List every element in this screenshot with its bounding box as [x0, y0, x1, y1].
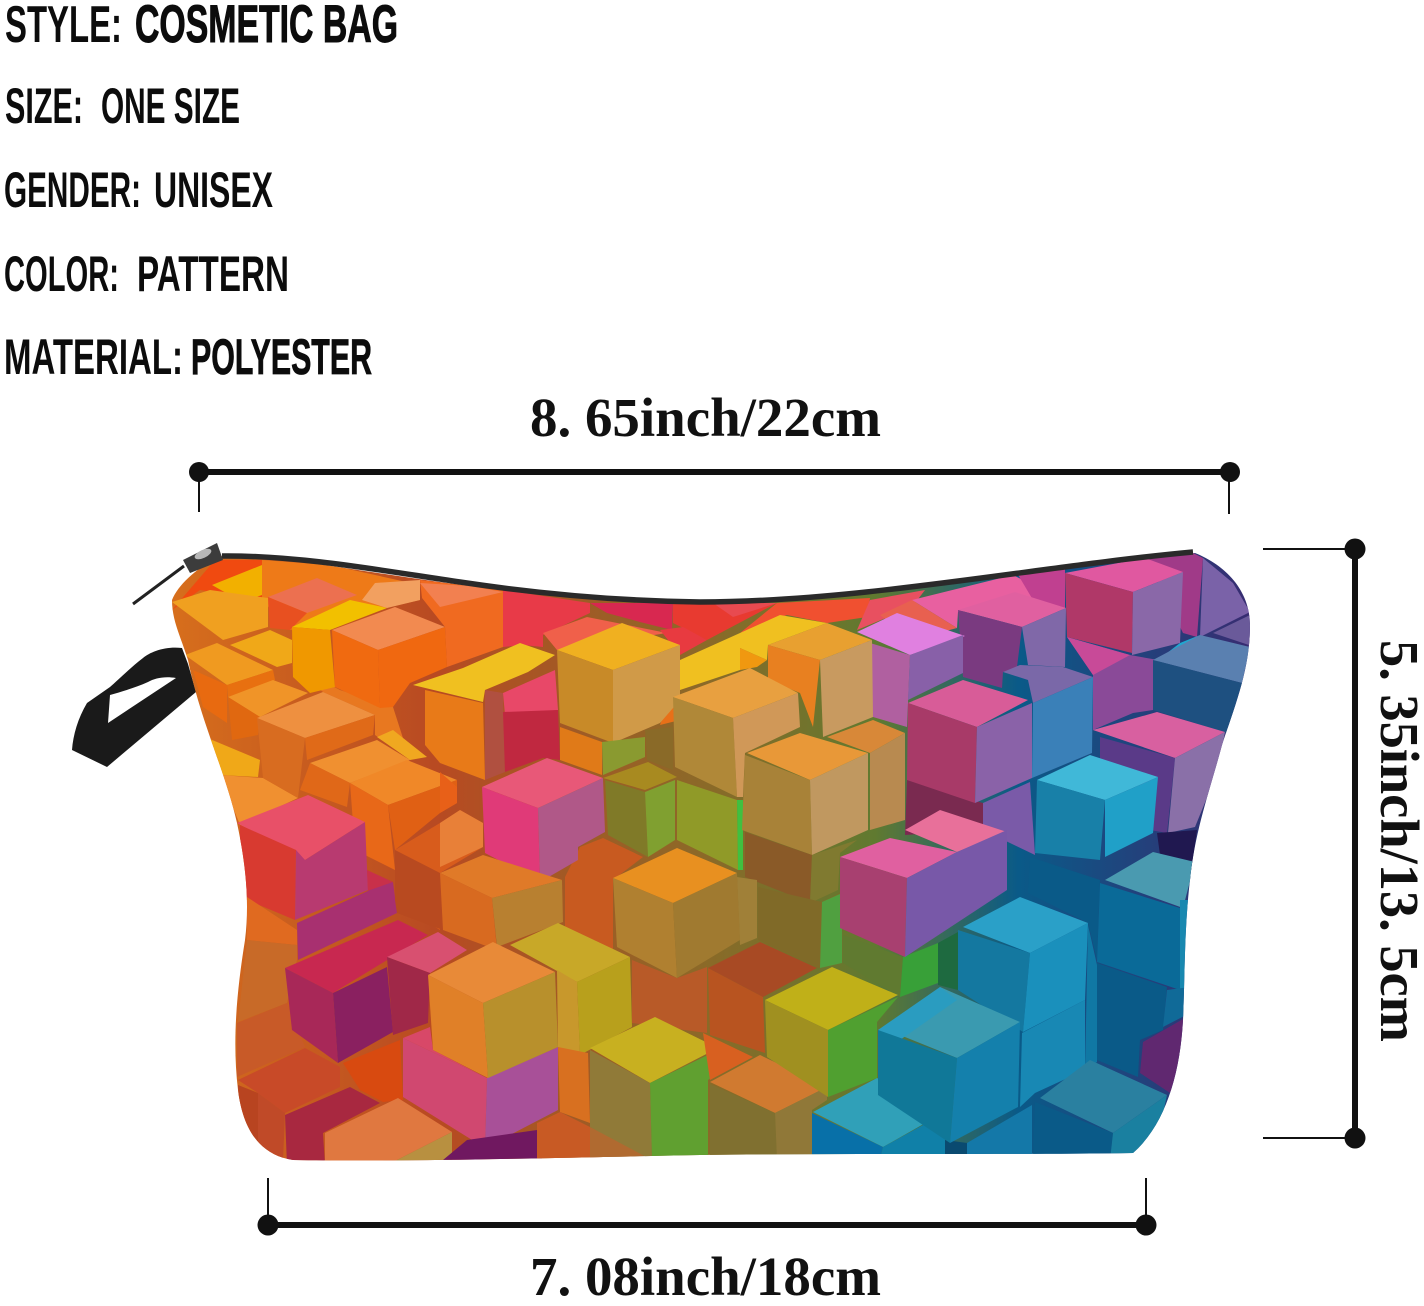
spec: size: ONE SIZE [101, 78, 240, 134]
spec: material: MATERIAL: [4, 329, 183, 385]
specifications list [4, 0, 398, 385]
cube: violet left upper [857, 613, 965, 727]
left yellow and orange tiles [172, 590, 410, 825]
cube: yellow lower centre [510, 923, 632, 1055]
pink tile and yellow cube upper left [268, 578, 387, 693]
spec: color: PATTERN [137, 246, 289, 302]
cube: yellow green lower right [765, 967, 898, 1097]
cube: pink small [387, 932, 467, 1035]
cube: crimson left lower [285, 920, 428, 1063]
zipper pull [133, 543, 223, 604]
cube: yellow bottom [590, 1017, 718, 1160]
spec: size [5, 78, 240, 134]
cube: teal upper [1035, 755, 1158, 860]
top width measurement line [189, 462, 1240, 514]
cube: pink centre [482, 758, 605, 882]
orange mid-left tiles [300, 730, 483, 930]
centre green yellow cubes [603, 762, 743, 870]
cosmetic bag with cube pattern [160, 540, 1260, 1170]
height measurement line [1263, 538, 1366, 1148]
bottom left cubes [238, 1040, 652, 1165]
left orange column [237, 897, 305, 1077]
centre green joints [560, 727, 673, 775]
cube: blue lower front [878, 987, 1032, 1160]
behind pink: orange red [395, 838, 643, 955]
back row [172, 560, 1065, 667]
spec: color [4, 246, 289, 302]
cube: top right magenta [1065, 558, 1183, 655]
spec: gender: UNISEX [154, 162, 273, 218]
cube: orange centre [613, 848, 757, 1033]
green middle cubes [781, 893, 958, 997]
bottom width label: 7. 08inch/18cm [530, 1246, 881, 1306]
cube: pink left [237, 795, 397, 960]
cube: orange left [257, 692, 375, 798]
cube: navy right [1153, 635, 1250, 733]
cube: brick centre [708, 942, 817, 1053]
cube: orange upper left [332, 607, 447, 708]
cube: blue purple overlap [905, 665, 1093, 855]
cube: blue bottom right [1033, 1060, 1167, 1160]
spec: material: POLYESTER [191, 329, 372, 385]
spec: gender: GENDER: [4, 162, 141, 218]
bottom width measurement line [258, 1178, 1156, 1236]
wrist strap [72, 648, 196, 767]
cube: yellow orange left centre [413, 643, 560, 780]
cube: orange mid [440, 855, 563, 950]
cube: pink base [403, 1027, 558, 1148]
bag zipper [222, 552, 1193, 602]
cube: blue base [812, 1078, 967, 1160]
blue right stack [1058, 852, 1192, 1093]
cube: purple upper [958, 592, 1066, 688]
far right top [1067, 553, 1255, 730]
cube: orange lower [428, 942, 558, 1078]
cube: magenta centre right [907, 680, 1032, 803]
spec: style [5, 0, 398, 54]
cube: tan right block [827, 720, 905, 830]
cube: purple lilac right [1093, 712, 1225, 880]
spec: size: SIZE: [5, 78, 83, 134]
cube: tan top right [768, 623, 873, 737]
cube: orange bottom [703, 1033, 827, 1160]
top width label: 8. 65inch/22cm [530, 387, 881, 448]
cube: tan centre [673, 668, 800, 797]
cube: orange centre top [557, 623, 680, 743]
cube: purple pink centre right [840, 810, 1007, 957]
yellow behind centre [660, 615, 827, 725]
cube: blue lower [958, 897, 1088, 1107]
cube: tan right centre [742, 733, 868, 903]
spec: color: COLOR: [4, 246, 119, 302]
